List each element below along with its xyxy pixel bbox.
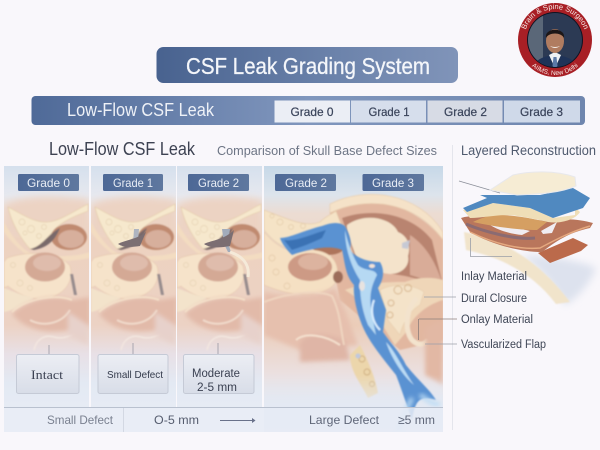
leader and bracket [459,181,500,193]
layered reconstruction illustration [459,172,596,305]
tabs: grade 0 to 3: Grade 1 [368,105,410,119]
badge: Brain & Spine Surgeon [518,3,592,77]
grade 0 chip: Grade 0 [27,176,70,190]
title banner [156,47,458,83]
cream layer [463,203,580,223]
moderate label box [184,343,254,394]
section subheading: comparison: Comparison of Skull Base Defect Sizes [217,143,437,158]
grade 2 chip: Grade 2 [285,176,327,190]
blue dural layer [463,188,590,218]
badge: Brain & Spine Surgeon: Brain & Spine Surgeon [521,4,588,30]
inlay material: Inlay Material [461,271,527,283]
small defect label box [98,343,168,394]
section heading: Low-Flow CSF Leak: Low-Flow CSF Leak [49,139,196,159]
arrow [220,418,256,423]
moderate label box: 2-5 mm [197,382,237,394]
grade 1 chip [103,174,163,191]
underlying bone and soft shadow [464,232,596,305]
grade 3 chip: Grade 3 [372,176,414,190]
panel: Grade 2 and 3 large defect with CSF flow [264,166,443,432]
low-flow header bar with grade tabs [32,96,585,125]
grade 3 chip [362,174,424,191]
onlay orange layer [473,215,547,230]
grade 2 chip [275,174,336,191]
reconstruction labels [418,271,546,351]
vascularized flap layer [538,238,588,263]
inlay pad [490,172,576,195]
tabs: grade 0 to 3: Grade 2 [444,105,487,119]
badge: Brain & Spine Surgeon: AIIMS, New Delhi [532,62,578,76]
anatomy [264,194,443,415]
CSF flow [280,223,440,430]
bar label: Low-Flow CSF Leak [67,100,215,120]
intact label box [16,345,79,394]
onlay material: Onlay Material [461,314,533,326]
large defect range: Large Defect [309,413,380,427]
panel: Grade 0 intact [4,166,90,407]
panel: Grade 1 small defect [91,166,177,407]
defect mark [133,229,139,238]
grade 0 chip [18,174,79,191]
dural muscle layer [461,216,593,252]
small defect label box: Small Defect [107,369,163,381]
moderate label box: Moderate [192,368,240,380]
size scale bar: ≥5 mm [398,413,435,427]
size scale bar [4,407,443,432]
vascularized flap: Vascularized Flap [461,339,546,351]
defect mark [222,229,231,252]
title banner: CSF Leak Grading System [186,53,430,79]
size scale bar: O-5 mm [154,413,199,427]
white inner layers [490,222,557,235]
tabs: grade 0 to 3 [274,100,580,122]
grade 2 chip [188,174,249,191]
intact label box: Intact [31,368,64,382]
grade 1 chip: Grade 1 [113,176,153,190]
dural closure: Dural Closure [461,293,527,305]
panel: Grade 2 moderate defect [177,166,263,407]
small defect range: Small Defect [47,413,114,427]
section heading: layered reconstruction: Layered Reconstruction [461,143,596,158]
tabs: grade 0 to 3: Grade 0 [290,105,334,119]
tabs: grade 0 to 3: Grade 3 [520,105,563,119]
grade 2 chip: Grade 2 [198,176,239,190]
